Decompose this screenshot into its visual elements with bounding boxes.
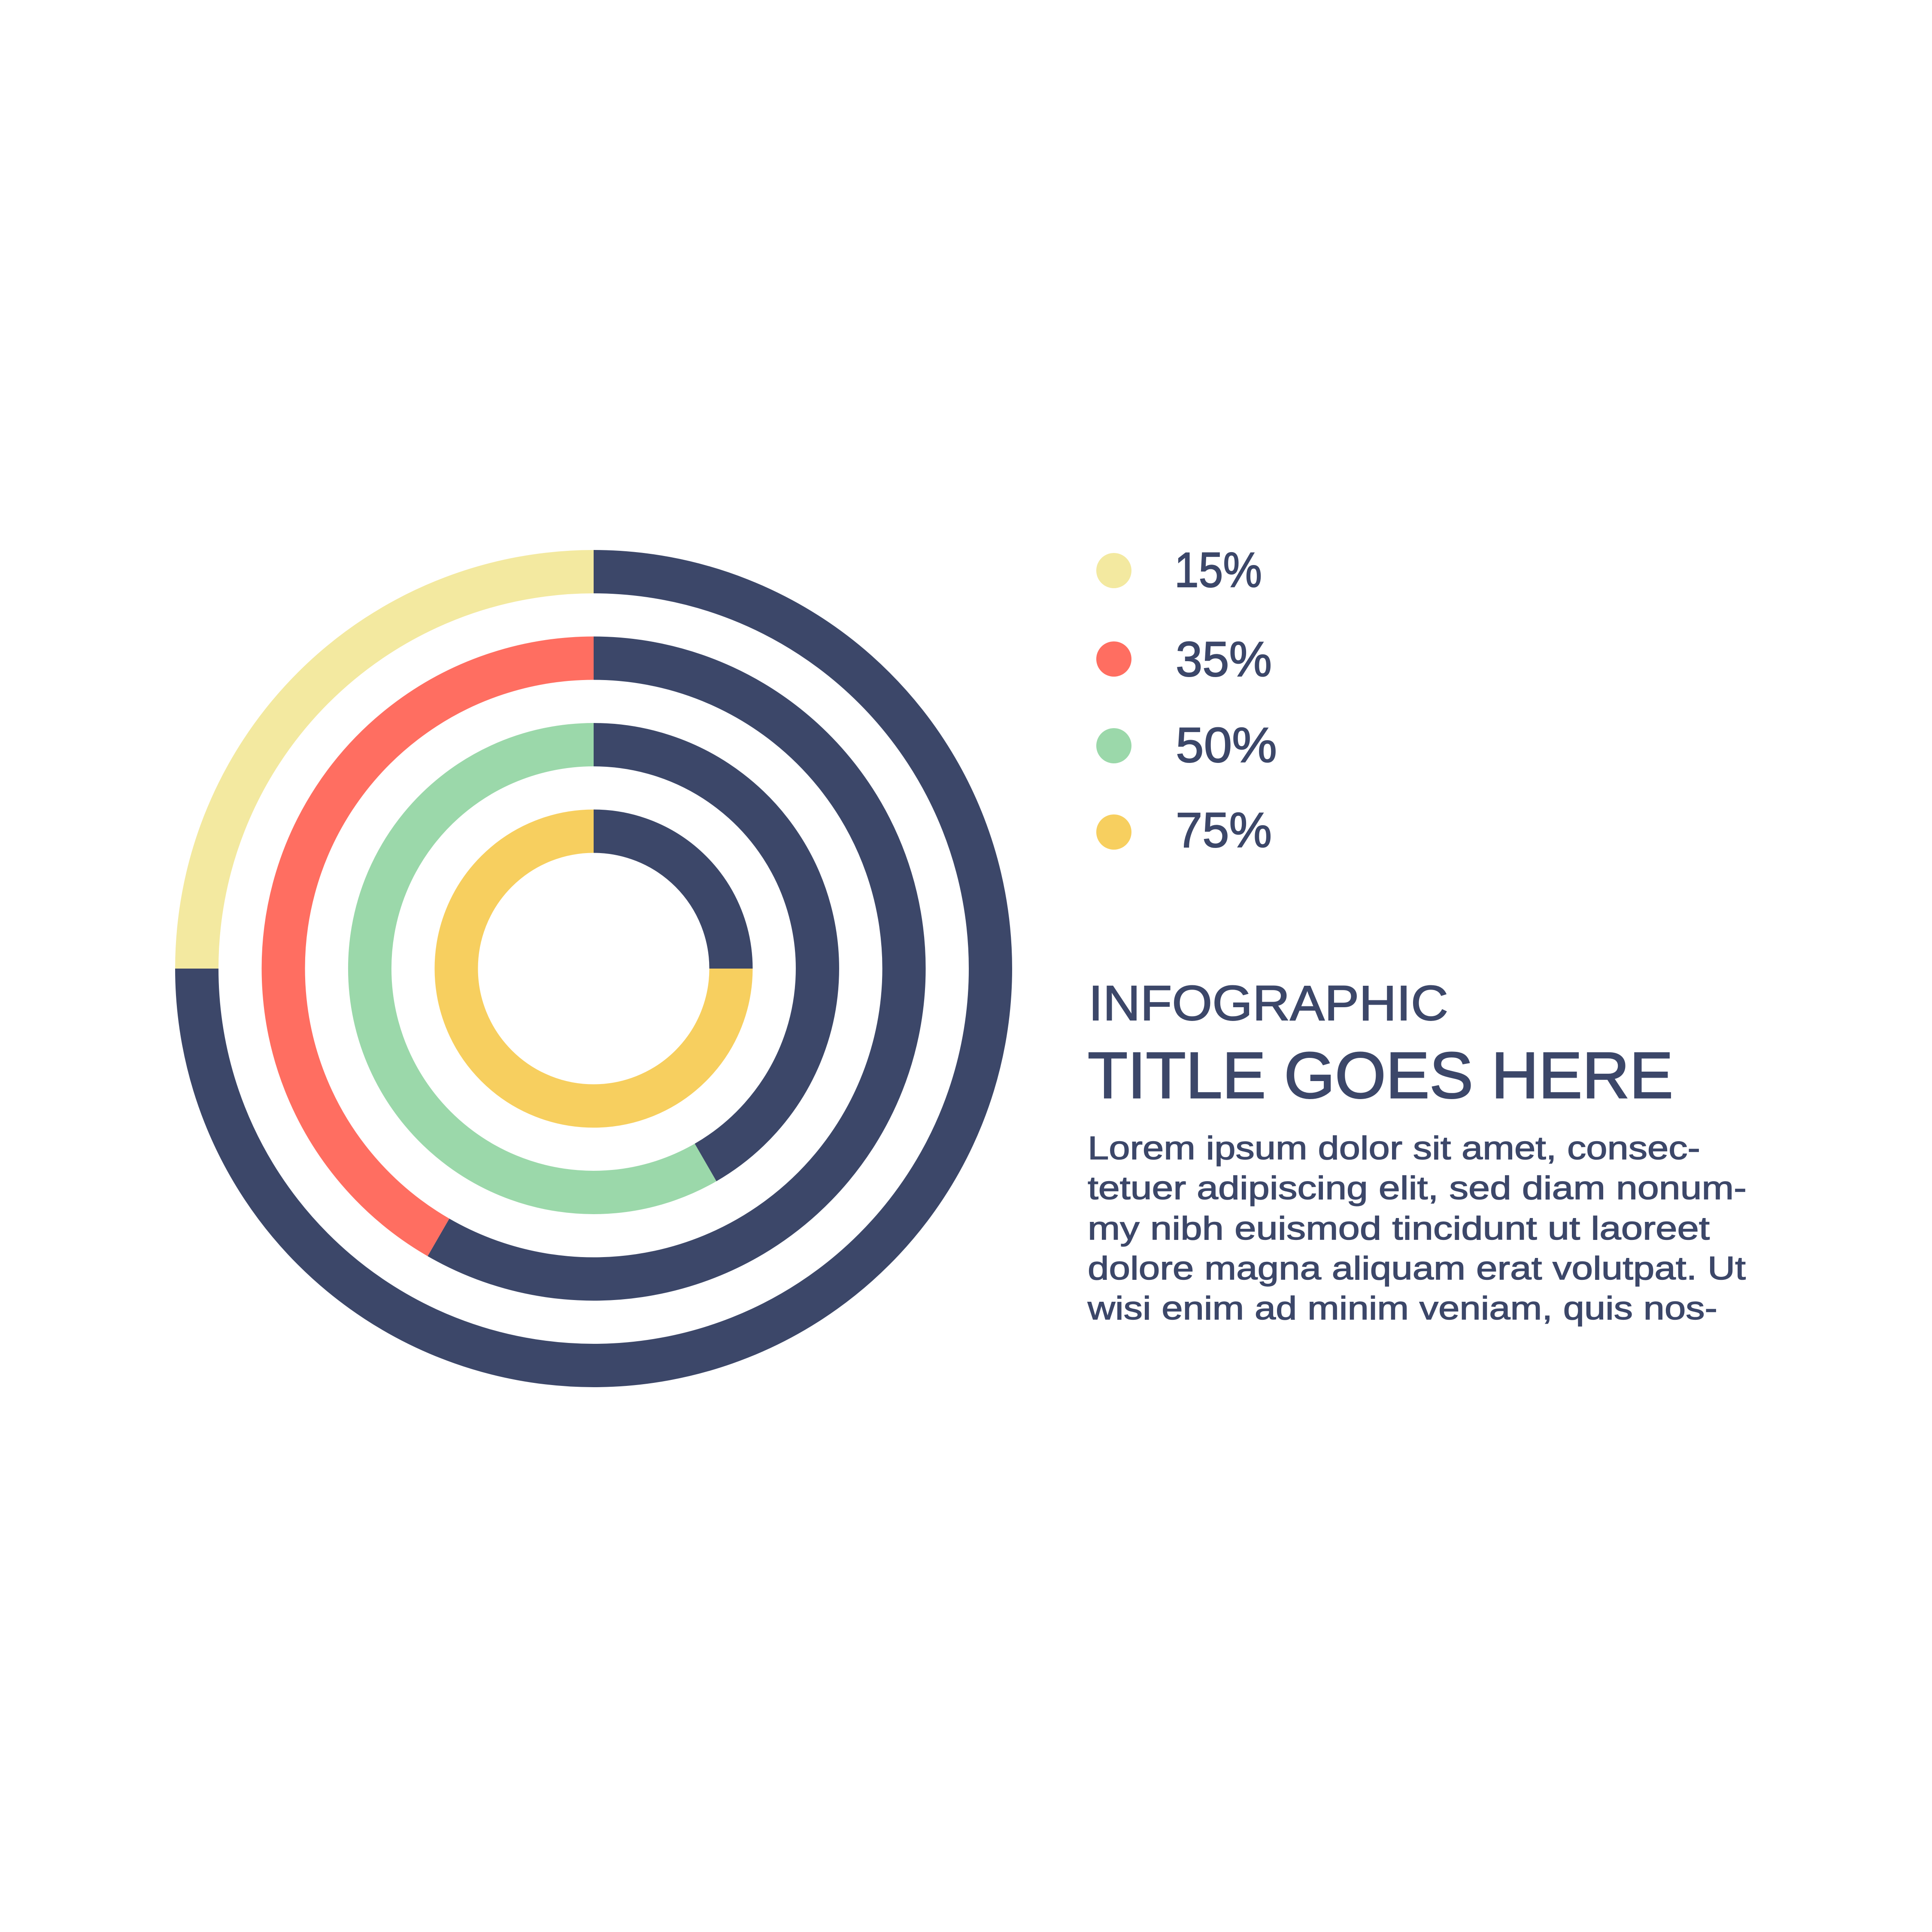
arc: inner amber: [456, 831, 731, 1106]
legend item: 15%: [1096, 543, 1262, 598]
legend: [1096, 543, 1277, 858]
label: 50%: 50%: [1176, 718, 1277, 773]
icon: coral dot: [1096, 641, 1131, 677]
icon: pale yellow dot: [1096, 553, 1131, 588]
arc: outer navy remainder: [197, 572, 991, 1365]
body line 5: wisi enim ad minim veniam, quis nos-: [1087, 1290, 1717, 1327]
icon: amber dot: [1096, 814, 1131, 850]
legend item: 35%: [1096, 632, 1272, 687]
arc: second coral: [283, 658, 594, 1237]
label: 75%: 75%: [1176, 803, 1272, 858]
heading: title goes here: TITLE GOES HERE: [1088, 1039, 1673, 1112]
ring: 35%: [283, 658, 904, 1279]
arc: third green: [370, 744, 706, 1193]
heading: infographic: INFOGRAPHIC: [1089, 976, 1448, 1031]
arc: third navy remainder: [594, 744, 817, 1163]
ring: 75% inner: [456, 831, 731, 1106]
label: 15%: 15%: [1174, 543, 1262, 598]
body line 1: Lorem ipsum dolor sit amet, consec-: [1088, 1130, 1700, 1166]
body line 3: my nibh euismod tincidunt ut laoreet: [1088, 1210, 1710, 1247]
label: 35%: 35%: [1176, 632, 1272, 687]
legend item: 50%: [1096, 718, 1277, 773]
arc: inner navy remainder: [594, 831, 731, 969]
legend item: 75%: [1096, 803, 1272, 858]
heading block: [1088, 976, 1673, 1112]
body text: [1087, 1130, 1747, 1327]
concentric ring chart: [197, 572, 991, 1365]
body line 2: tetuer adipiscing elit, sed diam nonum-: [1088, 1170, 1747, 1206]
arc: outer pale yellow: [197, 572, 594, 969]
body line 4: dolore magna aliquam erat volutpat. Ut: [1088, 1250, 1746, 1287]
arc: second navy remainder: [439, 658, 904, 1279]
ring: 15% outer: [197, 572, 991, 1365]
ring: 50%: [370, 744, 817, 1193]
icon: green dot: [1096, 728, 1131, 763]
